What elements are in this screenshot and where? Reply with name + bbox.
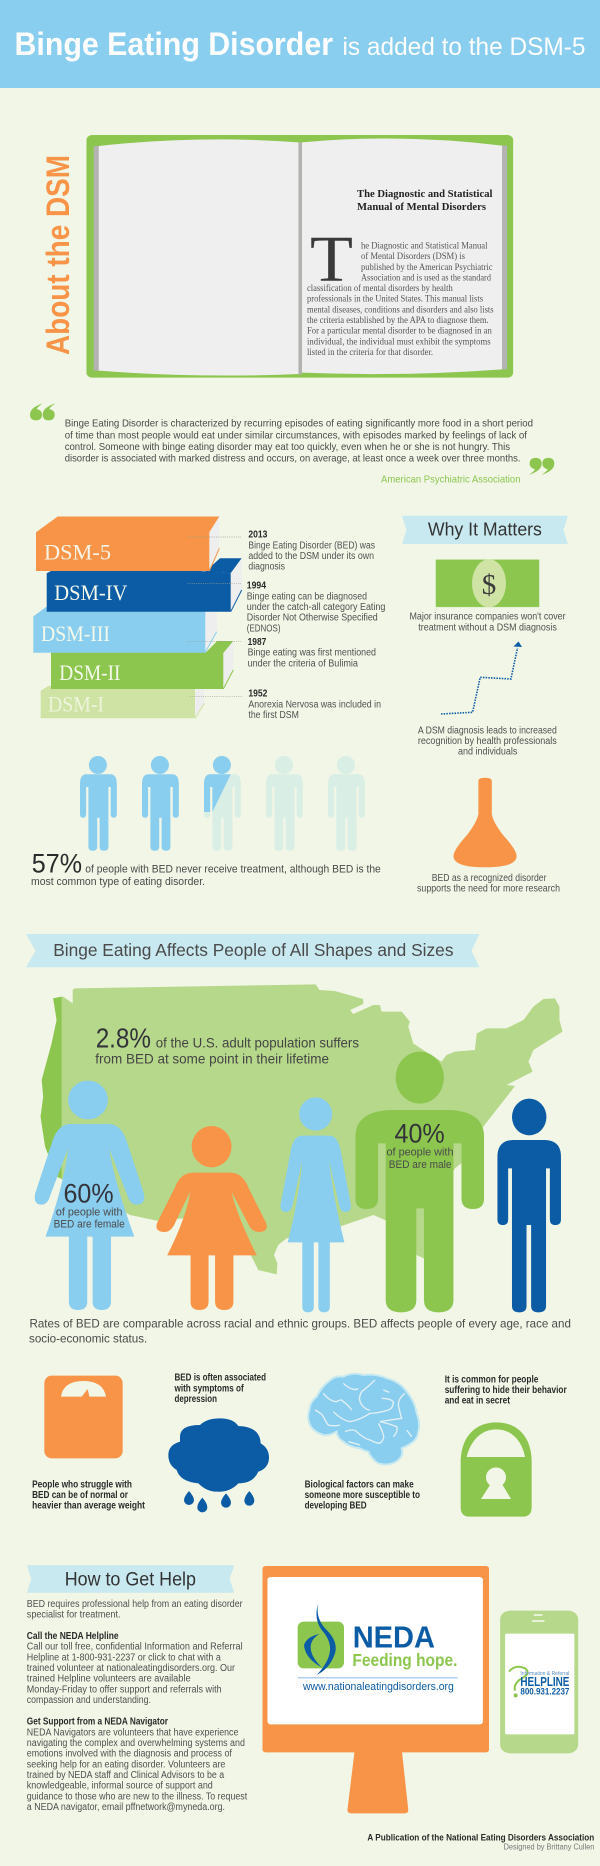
text: secret: suffering to hide their behavior xyxy=(445,1385,567,1396)
text: NEDA helpline: Monday-Friday to offer support and referrals with xyxy=(27,1684,222,1695)
book: DSM-IV xyxy=(47,558,242,612)
text: research xyxy=(417,873,560,895)
quote text: control. Someone with binge eating disorder may eat too quickly, even when he or she is not hungry. This xyxy=(65,442,510,453)
book body text: published by the American Psychiatric xyxy=(361,262,492,273)
helpline text: HELPLINE xyxy=(520,1674,570,1689)
text: NEDA navigator: a NEDA navigator, email pffnetwork@myneda.org. xyxy=(27,1802,225,1813)
book: DSM-5 xyxy=(36,516,219,571)
book body text: listed in the criteria for that disorder. xyxy=(307,347,433,358)
entry 1952 xyxy=(248,689,381,721)
statistic: 40% male xyxy=(386,1119,454,1171)
text: weight: BED can be of normal or xyxy=(32,1490,128,1501)
book: DSM-III: DSM-III xyxy=(41,621,110,646)
title: Binge Eating Disorder xyxy=(14,26,333,62)
figure: woman orange xyxy=(156,1126,267,1310)
book body text: the criteria established by the APA to diagnose them. xyxy=(307,315,489,326)
header banner xyxy=(0,0,600,88)
figure: man dark blue xyxy=(497,1099,561,1312)
text: NEDA navigator: navigating the complex and overwhelming systems and xyxy=(27,1738,245,1749)
statistic: 60% female: BED are female xyxy=(54,1219,125,1231)
helpline text: Information & Referral xyxy=(520,1671,569,1677)
statistic: 57% xyxy=(31,849,381,888)
entry 1952: 1952 xyxy=(248,689,268,700)
panel: open book xyxy=(86,135,513,378)
statistic: 2.8%: from BED at some point in their lifetime xyxy=(95,1050,329,1066)
heading ribbon: Binge Eating Affects People: Binge Eating Affects People of All Shapes and Sizes xyxy=(53,940,454,960)
text: NEDA helpline: trained Helpline volunteers are available xyxy=(27,1674,191,1685)
statistic: 57%: most common type of eating disorder. xyxy=(31,876,205,888)
text: biological: Biological factors can make xyxy=(305,1479,414,1490)
entry 2013: 2013 xyxy=(248,530,268,541)
icon: padlock xyxy=(461,1422,532,1517)
entry 1952: the first DSM xyxy=(248,710,299,721)
icon: desktop monitor with NEDA logo xyxy=(262,1566,489,1813)
chart: stacked DSM books xyxy=(33,516,243,718)
text: NEDA helpline: Call the NEDA Helpline xyxy=(27,1631,119,1642)
heading: About the DSM: About the DSM xyxy=(40,155,76,355)
icon: rain cloud xyxy=(168,1418,269,1512)
entry 1994: 1994 xyxy=(247,581,266,592)
helpline text: 800.931.2237 xyxy=(520,1687,569,1697)
person 3 partial xyxy=(204,756,241,851)
icon: bathroom scale xyxy=(44,1376,123,1458)
icon: brain xyxy=(308,1374,419,1464)
text: research: BED as a recognized disorder xyxy=(432,873,547,884)
book: DSM-II: DSM-II xyxy=(59,660,120,685)
entry 1994 xyxy=(247,581,385,634)
statistic: 40% male: 40% xyxy=(394,1119,445,1149)
book body text: mental diseases, conditions and disorders and also lists xyxy=(307,304,494,315)
chart: pictogram of five people xyxy=(80,756,365,851)
book heading xyxy=(357,188,492,213)
icon: flask xyxy=(454,778,517,867)
person 4 xyxy=(266,756,303,851)
quote text: of time than most people would eat under similar circumstances, with episodes marked by feelings of lack of xyxy=(65,430,527,441)
footer credits xyxy=(367,1832,594,1851)
book heading: Manual of Mental Disorders xyxy=(357,201,487,213)
NEDA logo text: Feeding hope. xyxy=(352,1650,457,1670)
text: research: supports the need for more research xyxy=(417,884,560,895)
text: NEDA navigator: knowledgeable, informal source of support and xyxy=(27,1781,213,1792)
icon: opening quote mark xyxy=(30,403,55,420)
icon: question mark xyxy=(509,1667,528,1697)
icon: dollar bill: $ xyxy=(482,569,496,601)
entry 2013 xyxy=(248,530,375,573)
statistic: 57%: of people with BED never receive treatment, although BED is the xyxy=(85,864,381,876)
NEDA logo text: www.nationaleatingdisorders.org xyxy=(302,1681,454,1693)
heading ribbon: Why It Matters: Why It Matters xyxy=(428,519,542,539)
entry 2013: diagnosis xyxy=(248,562,285,573)
book body text: classification of mental disorders by health xyxy=(307,283,453,294)
text: NEDA helpline: Call our toll free, confidential Information and Referral xyxy=(27,1642,243,1653)
text: NEDA navigator: NEDA Navigators are volunteers that have experience xyxy=(27,1727,239,1738)
heading ribbon: Binge Eating Affects People xyxy=(26,934,480,967)
text: help introduction: BED requires professional help from an eating disorder xyxy=(27,1599,243,1610)
NEDA logo mark xyxy=(298,1603,458,1678)
text: secret: and eat in secret xyxy=(445,1396,511,1407)
entry 1994: Binge eating can be diagnosed xyxy=(247,591,367,602)
quote text: disorder is associated with marked distress and occurs, on average, at least once a week over three months. xyxy=(65,453,520,464)
icon: closing quote mark xyxy=(529,458,554,475)
timeline text xyxy=(247,530,385,721)
text: secret: It is common for people xyxy=(445,1374,539,1385)
text: rates of BED: socio-economic status. xyxy=(29,1331,147,1345)
figure: woman blue xyxy=(35,1081,144,1310)
NEDA logo text: NEDA xyxy=(353,1619,435,1654)
statistic: 40% male: of people with xyxy=(386,1146,454,1158)
text: recognition: recognition by health professionals xyxy=(418,736,557,747)
text: NEDA helpline: Helpline at 1-800-931-2237 or click to chat with a xyxy=(27,1652,221,1663)
drop cap: T xyxy=(310,223,353,296)
text: help introduction: specialist for treatment. xyxy=(27,1610,120,1621)
statistic: 2.8% xyxy=(95,1023,359,1066)
text: rates of BED xyxy=(29,1317,571,1345)
map: United States xyxy=(41,984,562,1274)
arrow: dotted rising line xyxy=(441,642,522,714)
figures: people of all shapes xyxy=(35,1052,561,1312)
panel: quotation xyxy=(30,403,554,485)
text: recognition: and individuals xyxy=(458,747,517,758)
entry 1987: Binge eating was first mentioned xyxy=(248,648,376,659)
person 1 xyxy=(80,756,117,851)
text: weight: heavier than average weight xyxy=(32,1501,146,1512)
text: depression: with symptoms of xyxy=(174,1383,244,1394)
title xyxy=(14,26,586,62)
statistic: 40% male: BED are male xyxy=(389,1159,452,1171)
figure: slim woman blue xyxy=(280,1097,351,1312)
entry 1952: Anorexia Nervosa was included in xyxy=(248,699,381,710)
text: insurance: Major insurance companies won't cover xyxy=(410,612,566,623)
book heading: The Diagnostic and Statistical xyxy=(357,188,492,200)
book body text: of Mental Disorders (DSM) is xyxy=(361,251,465,262)
figure: man green xyxy=(355,1052,484,1312)
book: DSM-5: DSM-5 xyxy=(44,539,111,564)
statistic: 60% female: 60% xyxy=(64,1179,114,1209)
text: weight: People who struggle with xyxy=(32,1479,132,1490)
text: biological xyxy=(305,1479,420,1512)
heading ribbon: How to Get Help xyxy=(27,1565,234,1593)
text: depression xyxy=(174,1373,266,1405)
text: insurance: treatment without a DSM diagnosis xyxy=(418,622,557,633)
quote text: Binge Eating Disorder is characterized by recurring episodes of eating significantly more food in a short period xyxy=(65,419,533,430)
text: NEDA helpline: trained volunteer at nationaleatingdisorders.org. Our xyxy=(27,1663,236,1674)
text: NEDA navigator: seeking help for an eating disorder. Volunteers are xyxy=(27,1759,226,1770)
book: DSM-I xyxy=(41,686,204,718)
statistic: 57%: 57% xyxy=(32,849,82,879)
text: NEDA navigator: guidance to those who are new to the illness. To request xyxy=(27,1791,247,1802)
text: biological: developing BED xyxy=(305,1501,367,1512)
text: secret xyxy=(445,1374,567,1407)
text: insurance xyxy=(410,612,566,633)
statistic: 2.8%: 2.8% xyxy=(96,1023,151,1054)
heading ribbon: Why It Matters xyxy=(402,516,568,544)
book: DSM-III xyxy=(33,607,217,653)
entry 1987: 1987 xyxy=(248,637,267,648)
statistic: 2.8%: of the U.S. adult population suffers xyxy=(156,1035,359,1051)
text: NEDA navigator: emotions involved with the diagnosis and process of xyxy=(27,1749,232,1760)
entry 1994: under the catch-all category Eating xyxy=(247,602,385,613)
book: DSM-IV: DSM-IV xyxy=(54,580,127,605)
book body text: Association and is used as the standard xyxy=(361,272,491,284)
entry 1987: under the criteria of Bulimia xyxy=(248,658,358,669)
text: biological: someone more susceptible to xyxy=(305,1490,420,1501)
text: NEDA navigator: trained by NEDA staff and Clinical Advisors to be a xyxy=(27,1770,225,1781)
text: NEDA helpline xyxy=(27,1631,243,1706)
title: is added to the DSM-5 xyxy=(342,33,586,61)
text: help introduction xyxy=(27,1599,243,1621)
entry 1994: Disorder Not Otherwise Specified xyxy=(247,613,378,624)
statistic: 60% female xyxy=(54,1179,125,1231)
entry 1994: (EDNOS) xyxy=(247,623,280,634)
book body text xyxy=(307,240,494,358)
quote text xyxy=(65,419,533,464)
text: NEDA helpline: compassion and understanding. xyxy=(27,1695,151,1706)
book: DSM-II xyxy=(51,641,233,689)
entry 1987 xyxy=(248,637,376,669)
footer credits: Designed by Brittany Cullen xyxy=(504,1842,594,1851)
helpline text xyxy=(520,1671,570,1697)
book body text: professionals in the United States. This manual lists xyxy=(307,294,483,305)
person 5 xyxy=(328,756,365,851)
NEDA logo text xyxy=(302,1619,457,1693)
text: recognition: A DSM diagnosis leads to increased xyxy=(418,725,557,736)
book body text: individual, the individual must exhibit the symptoms xyxy=(307,336,491,347)
text: weight xyxy=(32,1479,146,1512)
text: NEDA navigator xyxy=(27,1717,247,1813)
heading ribbon: How to Get Help: How to Get Help xyxy=(65,1569,196,1590)
icon: dollar bill xyxy=(436,559,540,607)
text: rates of BED: Rates of BED are comparable across racial and ethnic groups. BED affects people of every age, race and xyxy=(30,1317,571,1331)
book: DSM-I: DSM-I xyxy=(48,692,104,717)
entry 2013: Binge Eating Disorder (BED) was xyxy=(248,540,375,551)
entry 2013: added to the DSM under its own xyxy=(248,551,374,562)
statistic: 60% female: of people with xyxy=(56,1206,122,1218)
text: depression: depression xyxy=(174,1394,217,1405)
book body text: For a particular mental disorder to be diagnosed in an xyxy=(307,326,492,337)
book body text: he Diagnostic and Statistical Manual xyxy=(361,240,488,252)
text: NEDA navigator: Get Support from a NEDA Navigator xyxy=(27,1717,168,1728)
text: recognition xyxy=(418,725,557,758)
person 2 xyxy=(142,756,179,851)
text: depression: BED is often associated xyxy=(174,1373,266,1384)
attribution: American Psychiatric Association xyxy=(381,474,521,485)
icon: smartphone with helpline xyxy=(500,1611,578,1753)
